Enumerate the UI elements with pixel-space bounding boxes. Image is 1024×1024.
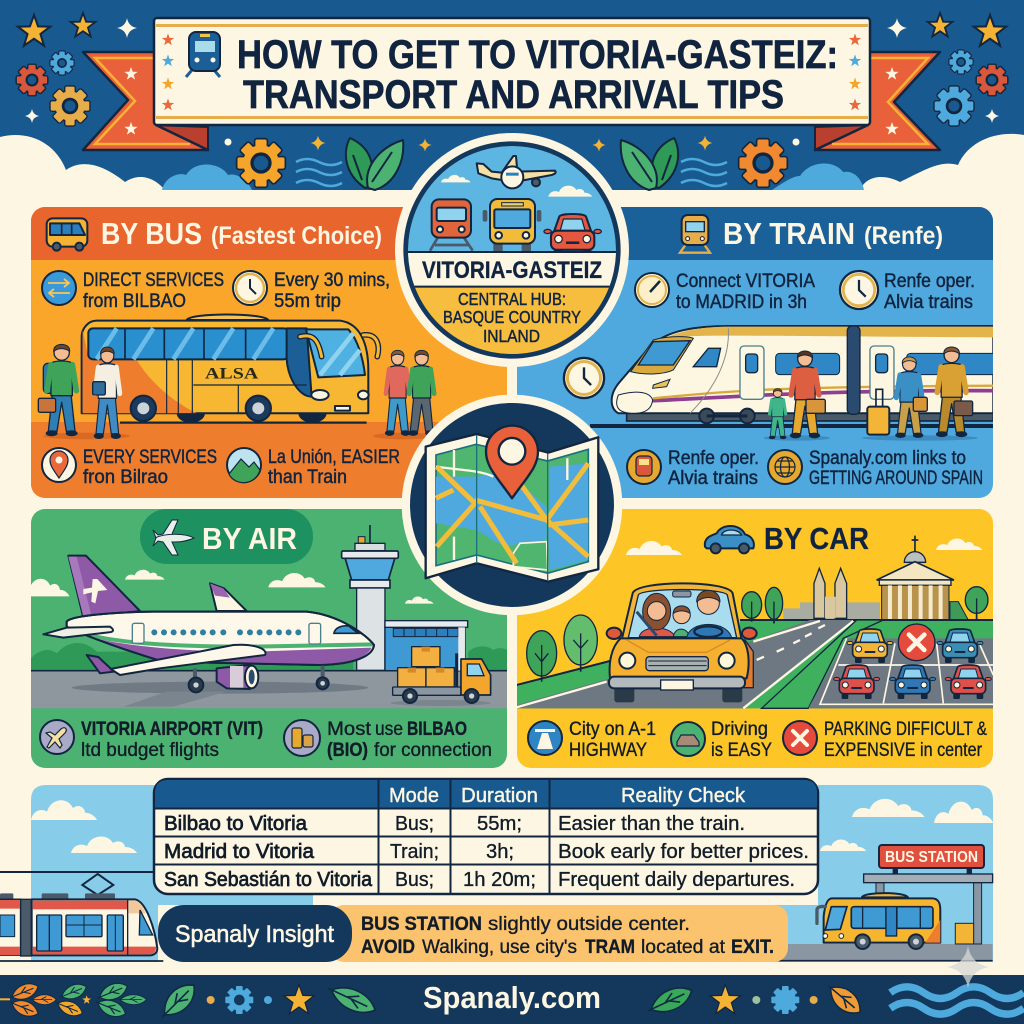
feature: la union: than Train [268, 467, 347, 488]
feature: parking: EXPENSIVE in center [824, 740, 983, 761]
train heading [680, 215, 943, 253]
icon: train [186, 32, 220, 77]
feature: parking [783, 719, 987, 761]
row: Madrid: Train; [390, 841, 439, 863]
feature: every services: EVERY SERVICES [83, 447, 217, 468]
bus heading: (Fastest Choice) [211, 222, 382, 250]
leaves left [346, 138, 403, 190]
icon: mountains [227, 448, 261, 483]
panel: by train [517, 207, 997, 498]
callout: spanaly insight [158, 905, 788, 962]
row: San Sebastian: Frequent daily departures. [558, 869, 795, 891]
cream clouds left [0, 135, 165, 190]
car heading: BY CAR [764, 521, 869, 556]
table header: Reality Check [621, 785, 746, 807]
illustration: Alvia train [590, 326, 997, 426]
feature: renfe alvia: Alvia trains [668, 468, 758, 489]
banner stars right [849, 34, 861, 110]
decorative stars left [18, 13, 431, 152]
parking lot [808, 638, 993, 708]
icon: bus small [47, 218, 87, 251]
callout: spanaly insight: slightly outside center. [488, 914, 690, 935]
hub clouds [441, 175, 592, 197]
feature: vitoria airport: VITORIA AIRPORT (VIT) [81, 719, 263, 740]
feature: driving: Driving [711, 719, 768, 740]
waving woman [385, 350, 410, 436]
icon: car small [705, 526, 754, 553]
feature: driving: is EASY [711, 740, 772, 761]
row: San Sebastian: 1h 20m; [463, 869, 536, 891]
traveller woman [93, 347, 121, 439]
terminal [385, 621, 468, 671]
callout: spanaly insight: Spanaly Insight [175, 921, 334, 948]
waves left [296, 159, 342, 186]
highway [517, 620, 853, 708]
feature: links: Spanaly.com links to [809, 448, 966, 469]
feature: highway [528, 719, 656, 761]
decorative stars right [592, 13, 1006, 152]
row: San Sebastian [164, 869, 795, 891]
feature: driving [671, 719, 772, 761]
title banner [154, 18, 870, 125]
skyline [783, 568, 968, 620]
train heading: (Renfe) [864, 222, 943, 250]
icon: location pin [42, 448, 76, 482]
feature: bilbao connection: BILBAO [407, 719, 467, 740]
hub circle: Vitoria-Gasteiz: CENTRAL HUB: [458, 289, 566, 309]
hub circle: Vitoria-Gasteiz: INLAND [483, 326, 540, 346]
hub circle: Vitoria-Gasteiz: BASQUE COUNTRY [443, 307, 581, 327]
airplane [43, 556, 374, 692]
table: routes [154, 779, 818, 894]
icon: train badge [627, 450, 661, 484]
bottom scene: bus station [755, 785, 993, 962]
title text: TRANSPORT AND ARRIVAL TIPS [243, 73, 784, 117]
hub airplane [477, 156, 556, 188]
table header: Duration [461, 785, 538, 807]
blue cloud left [162, 164, 252, 190]
row: San Sebastian: San Sebastián to Vitoria [164, 869, 373, 891]
icon: clock [233, 271, 267, 305]
feature: highway: HIGHWAY [569, 740, 647, 761]
feature: every services [42, 447, 217, 488]
feature: renfe alvia [627, 448, 759, 489]
feature: renfe alvia: Renfe oper. [668, 448, 759, 469]
hub circle: Vitoria-Gasteiz: VITORIA-GASTEIZ [422, 257, 602, 284]
child [769, 388, 786, 439]
feature: frequency: Every 30 mins, [274, 270, 390, 291]
ground [517, 620, 993, 708]
icon: red cross [783, 721, 817, 755]
cream clouds right [860, 134, 1024, 190]
passengers [763, 347, 978, 441]
bus station sign [879, 845, 984, 868]
feature: vitoria airport: ltd budget flights [81, 740, 219, 761]
hub train [430, 199, 473, 251]
callout: spanaly insight: AVOID [361, 937, 415, 958]
traveller with backpack [38, 344, 78, 436]
bottom scene: sky and tram [0, 785, 313, 962]
icon: globe [768, 450, 802, 484]
man in green [408, 350, 435, 436]
feature: direct services: DIRECT SERVICES [83, 270, 224, 291]
feature: bilbao connection: use [375, 719, 403, 740]
left ribbon [83, 52, 208, 150]
family car [607, 583, 757, 702]
illustration: ALSA coach: ALSA [205, 365, 259, 382]
feature: renfe operated: Alvia trains [884, 292, 973, 313]
train heading: BY TRAIN [723, 216, 855, 251]
table header: Mode [389, 785, 439, 807]
domed temple [877, 536, 954, 620]
feature: la union [227, 447, 400, 488]
feature: bilbao connection [284, 719, 492, 761]
footer site name: Spanaly.com [423, 980, 601, 1015]
panel: by car [517, 509, 993, 768]
right ribbon [815, 52, 940, 150]
bus station sign: BUS STATION [885, 849, 978, 866]
feature: direct services [42, 270, 224, 312]
header band [0, 0, 1024, 190]
illustration: ALSA coach [82, 314, 378, 423]
clouds over car panel [626, 538, 982, 555]
father [687, 590, 732, 638]
man in mustard [936, 347, 973, 437]
feature: links [768, 448, 983, 489]
row: Madrid [164, 841, 809, 863]
footer band [0, 975, 1024, 1024]
hub car [544, 214, 601, 256]
sky clouds [17, 570, 434, 604]
name band [408, 252, 616, 286]
icon: plane small [153, 520, 194, 555]
location pin [486, 426, 538, 498]
station bus [817, 893, 940, 949]
callout: spanaly insight: TRAM [585, 937, 635, 958]
panel: by bus [31, 207, 507, 498]
hub bus [483, 199, 541, 251]
gears right [739, 50, 1007, 187]
row: Bilbao: Bilbao to Vitoria [164, 813, 308, 835]
callout: spanaly insight: Walking, use city's [422, 937, 577, 958]
footer decorations right [643, 978, 1024, 1020]
woman in red [790, 351, 825, 438]
watermark sparkle [947, 946, 989, 988]
icon: clock [840, 271, 878, 309]
air heading pill: BY AIR [202, 521, 297, 556]
feature: bilbao connection: for connection [374, 740, 492, 761]
table header [389, 785, 746, 807]
icon: train small [680, 215, 710, 253]
title text: HOW TO GET TO VITORIA-GASTEIZ: [237, 33, 838, 77]
row: Madrid: Book early for better prices. [558, 841, 809, 863]
icon: speedometer [635, 273, 669, 307]
bus heading: BY BUS [101, 216, 202, 251]
feature: parking: PARKING DIFFICULT & [824, 719, 987, 740]
map circle with pin [402, 395, 622, 615]
feature: la union: La Unión, EASIER [268, 447, 400, 468]
no-parking sign [898, 624, 935, 661]
feature: vitoria airport [40, 719, 263, 761]
trees [527, 587, 988, 682]
feature: bilbao connection: Most [327, 719, 372, 740]
row: Bilbao: Bus; [395, 813, 434, 835]
icon: clock beside train [564, 358, 604, 398]
waves right [681, 159, 727, 186]
feature: direct services: from BILBAO [83, 291, 186, 312]
folded map [426, 434, 598, 582]
icon: arrows [42, 271, 76, 305]
title text [237, 33, 838, 117]
feature: frequency [233, 270, 390, 312]
people at bus [38, 344, 435, 439]
blue cloud right [772, 163, 864, 190]
feature: renfe operated: Renfe oper. [884, 271, 975, 292]
control tower [342, 525, 398, 670]
feature: every services: fron Bilrao [83, 467, 168, 488]
row: Bilbao: 55m; [477, 813, 522, 835]
illustration: airport scene [17, 525, 511, 708]
panel: by air [17, 509, 511, 768]
feature: frequency: 55m trip [274, 291, 341, 312]
woman in blue [895, 357, 927, 438]
banner stars left [162, 34, 174, 110]
feature: connect: to MADRID in 3h [676, 292, 807, 313]
cargo truck [391, 647, 491, 706]
row: Madrid: Madrid to Vitoria [164, 841, 315, 863]
feature: connect: Connect VITORIA [676, 271, 815, 292]
callout: spanaly insight: located at [641, 937, 726, 958]
yellow suitcase [867, 389, 889, 435]
row: Madrid: 3h; [486, 841, 514, 863]
gears left [17, 51, 285, 187]
row: Bilbao [164, 813, 745, 835]
car heading [705, 521, 869, 556]
air heading pill [140, 509, 313, 564]
icon: highway [528, 721, 562, 755]
woman [637, 593, 675, 637]
child [673, 606, 690, 637]
footer decorations left [0, 978, 379, 1024]
leaves right [621, 138, 678, 190]
callout: spanaly insight: BUS STATION [361, 914, 482, 935]
icon: plane badge [40, 720, 74, 754]
tram [0, 874, 163, 961]
feature: renfe operated [840, 271, 975, 313]
feature: connect [635, 271, 815, 313]
callout: spanaly insight: EXIT. [731, 937, 774, 958]
hub circle: Vitoria-Gasteiz [395, 133, 629, 367]
feature: bilbao connection: (BIO) [327, 740, 368, 761]
icon: luggage badge [284, 720, 320, 756]
bus heading [47, 216, 382, 251]
row: San Sebastian: Bus; [395, 869, 434, 891]
icon: car badge [671, 722, 705, 756]
feature: highway: City on A-1 [569, 719, 656, 740]
row: Bilbao: Easier than the train. [558, 813, 745, 835]
